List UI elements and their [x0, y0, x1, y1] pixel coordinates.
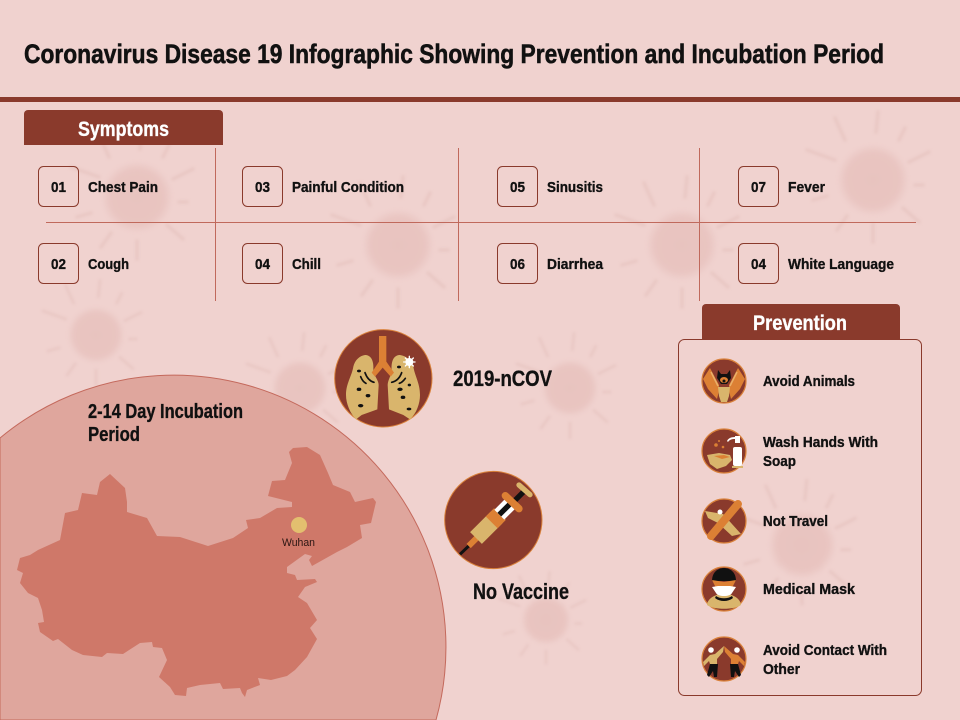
symptom 01: 01 — [51, 179, 66, 196]
text: medical mask: Medical Mask — [763, 581, 856, 598]
panel: symptoms — [24, 110, 916, 301]
map of China — [17, 447, 376, 697]
text: wash hands — [763, 434, 878, 470]
text: not travel: Not Travel — [763, 513, 828, 530]
incubation heading: 2-14 Day Incubation — [88, 401, 243, 423]
symptom 06 — [498, 244, 604, 284]
icon: medical mask — [702, 567, 746, 611]
text: avoid animals: Avoid Animals — [763, 373, 855, 390]
symptom 05 — [498, 166, 603, 206]
prevention heading — [702, 304, 900, 340]
icon: syringe — [445, 471, 542, 569]
symptom 04 white language: White Language — [788, 256, 894, 273]
symptom 06: 06 — [510, 256, 525, 273]
background virus pattern — [43, 112, 929, 663]
symptom 03 — [242, 166, 404, 206]
Wuhan marker — [282, 517, 315, 549]
symptom 03: 03 — [255, 179, 270, 196]
symptom 04 — [242, 244, 321, 284]
symptom 04 white language — [738, 244, 894, 284]
symptom 06: Diarrhea — [547, 256, 604, 273]
prevention panel border — [678, 340, 922, 696]
incubation heading — [88, 401, 243, 446]
symptom 01 — [38, 166, 158, 206]
symptom 05: Sinusitis — [547, 179, 603, 196]
Wuhan marker: Wuhan — [282, 537, 315, 549]
symptom 07: 07 — [751, 179, 766, 196]
symptoms heading — [24, 110, 223, 145]
symptom 02: 02 — [51, 256, 66, 273]
icon: bat — [702, 359, 746, 403]
icon: lungs — [335, 330, 432, 427]
symptom 04: 04 — [255, 256, 271, 273]
incubation heading: Period — [88, 424, 140, 446]
text: wash hands: Wash Hands With — [763, 434, 878, 451]
prevention heading: Prevention — [753, 312, 847, 335]
text: avoid contact: Avoid Contact With — [763, 642, 887, 659]
panel: incubation circle — [0, 375, 446, 720]
symptom 03: Painful Condition — [292, 179, 404, 196]
symptom 07 — [738, 166, 825, 206]
text: wash hands: Soap — [763, 453, 796, 470]
symptom 04 white language: 04 — [751, 256, 767, 273]
symptom 05: 05 — [510, 179, 525, 196]
icon: not travel — [702, 499, 746, 543]
symptoms heading: Symptoms — [78, 118, 169, 141]
icon: wash hands — [702, 429, 746, 473]
symptom 07: Fever — [788, 179, 825, 196]
symptom 04: Chill — [292, 256, 321, 273]
symptom 02: Cough — [88, 256, 129, 273]
icon: avoid contact — [702, 637, 746, 681]
header rule — [0, 97, 960, 102]
label: no vaccine: No Vaccine — [473, 579, 569, 604]
label: 2019-nCOV: 2019-nCOV — [453, 366, 552, 391]
text: avoid contact: Other — [763, 661, 800, 678]
symptom 01: Chest Pain — [88, 179, 158, 196]
symptom 02 — [38, 244, 129, 284]
text: avoid contact — [763, 642, 887, 678]
